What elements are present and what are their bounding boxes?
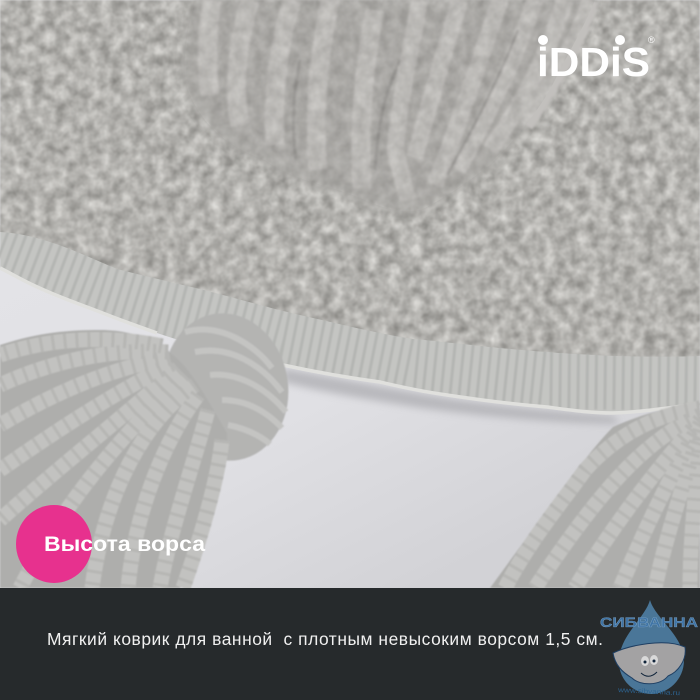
floor shadow	[283, 368, 620, 424]
icon: water drop	[619, 600, 684, 694]
icon: smiling bathtub	[613, 643, 685, 684]
logo: IDDIS: ®	[648, 35, 655, 45]
mat binding edge	[0, 225, 700, 415]
tassel strands	[0, 330, 227, 588]
piping	[0, 268, 690, 413]
pompom texture	[185, 0, 595, 211]
heading: pile height: Высота ворса	[44, 532, 206, 556]
pompom base	[185, 0, 595, 211]
watermark name: СИБВАННА	[600, 615, 698, 630]
tassel knot ball	[152, 303, 300, 471]
mat pile	[0, 0, 700, 357]
photo: bath mat	[0, 0, 700, 415]
description text: Мягкий коврик для ванной с плотным невысоким ворсом 1,5 см.	[47, 629, 603, 649]
badge: pink circle	[16, 505, 92, 583]
watermark: Sibvanna logo	[600, 600, 698, 697]
watermark url: www.sibvanna.ru	[617, 687, 680, 697]
footer band	[0, 588, 700, 700]
photo: right tassel	[490, 403, 700, 588]
pompom strands	[207, 0, 590, 200]
logo: IDDIS: iDDiS	[537, 39, 650, 85]
photo: left tassel	[0, 303, 300, 588]
photo: top pompom tassel	[185, 0, 595, 211]
